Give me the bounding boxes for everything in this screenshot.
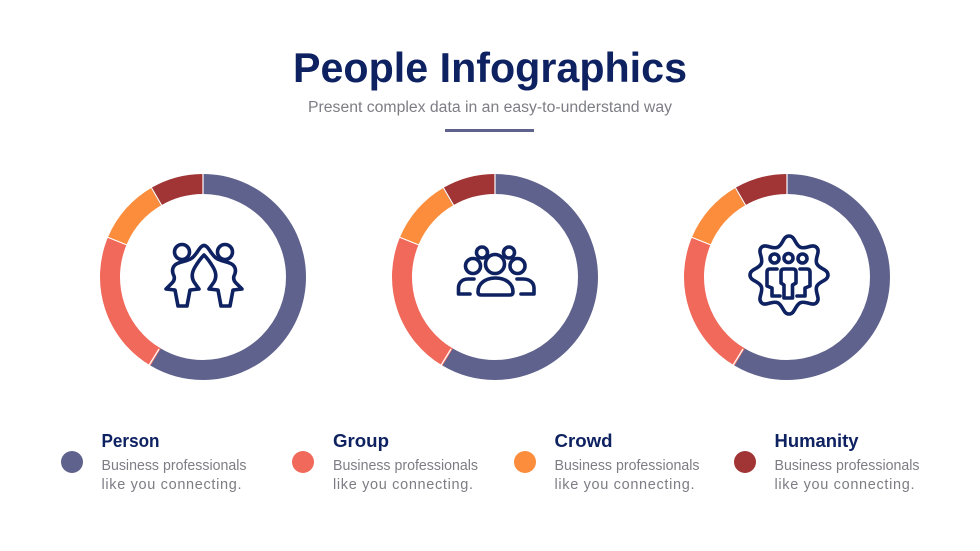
legend text: Business professionals <box>554 458 700 474</box>
legend heading: Crowd <box>554 430 612 451</box>
legend heading: Person <box>102 430 160 451</box>
legend text: like you connecting. <box>102 477 242 493</box>
legend heading: Group <box>333 430 389 451</box>
donut chart: person <box>75 149 331 405</box>
title: People Infographics <box>293 44 687 91</box>
legend text: Business professionals <box>774 458 920 474</box>
icon: group of people <box>458 247 534 295</box>
legend dot <box>61 451 83 473</box>
legend: person <box>61 430 246 493</box>
legend text: like you connecting. <box>554 477 694 493</box>
icon: two people high five <box>166 244 242 306</box>
legend heading: Humanity <box>774 430 859 451</box>
legend: group <box>292 430 478 493</box>
legend text: Business professionals <box>333 458 478 474</box>
donut chart: group <box>367 149 623 405</box>
legend: crowd <box>514 430 700 493</box>
legend dot <box>292 451 314 473</box>
legend dot <box>514 451 536 473</box>
legend text: Business professionals <box>102 458 246 474</box>
subtitle: Present complex data in an easy-to-understand way <box>308 99 672 116</box>
legend text: like you connecting. <box>333 477 473 493</box>
donut chart: crowd <box>659 149 915 405</box>
title underline <box>445 129 534 132</box>
legend dot <box>734 451 756 473</box>
legend: humanity <box>734 430 920 493</box>
icon: people in gear <box>750 236 828 314</box>
legend text: like you connecting. <box>774 477 914 493</box>
